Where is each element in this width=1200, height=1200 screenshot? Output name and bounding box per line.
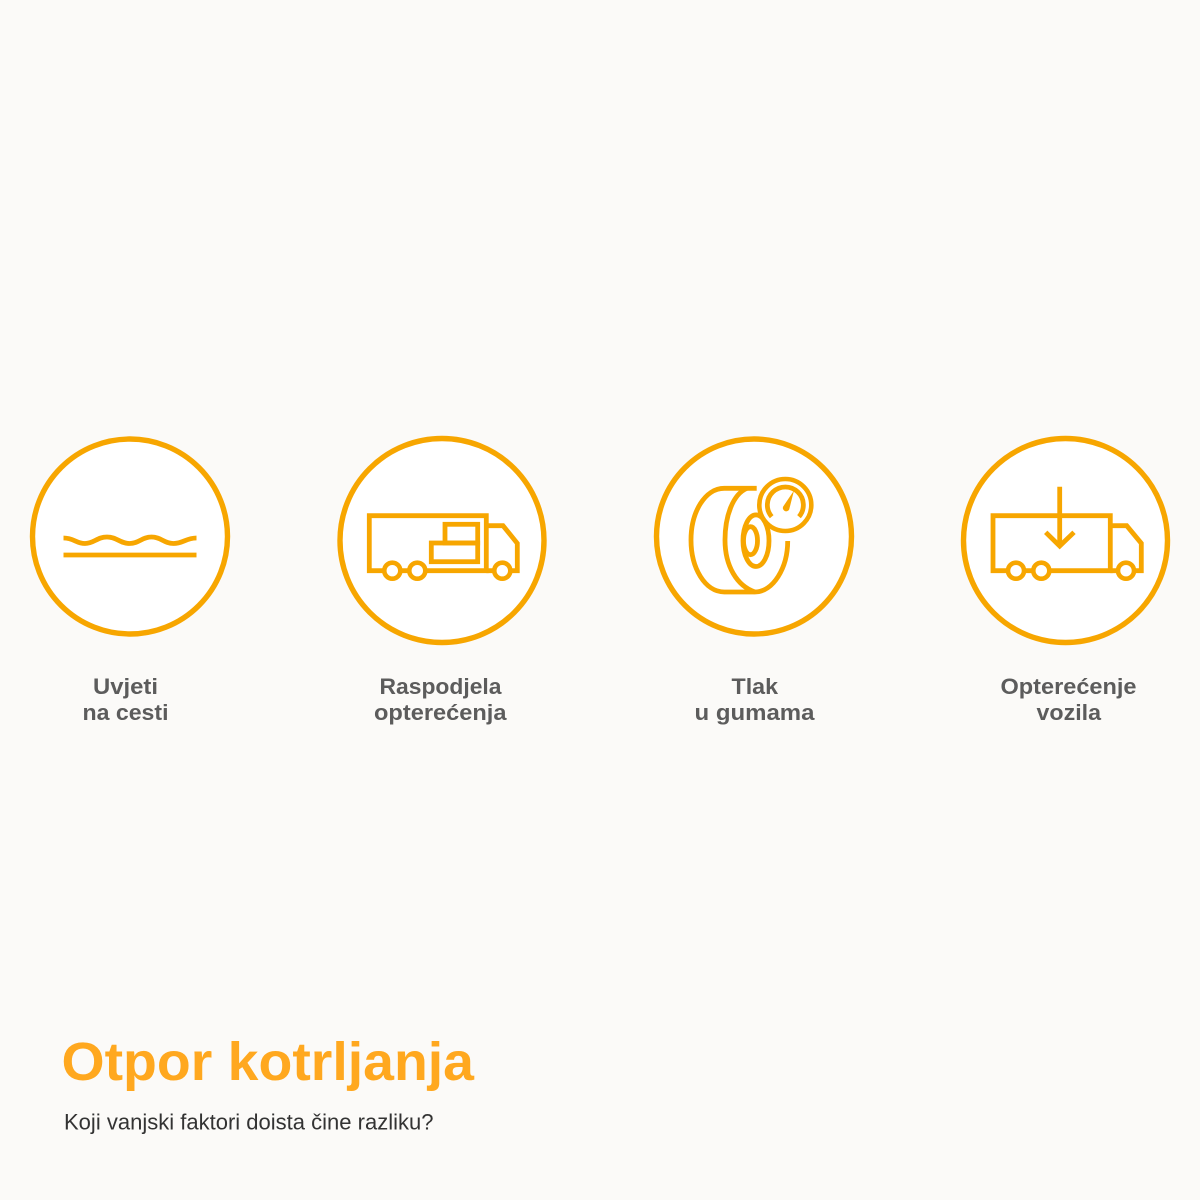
panel: load distribution [340,438,544,725]
subtitle: Koji vanjski faktori doista čine razliku? [64,1110,434,1134]
panel: road conditions [32,439,228,725]
icon: truck with down arrow [964,438,1168,642]
label: vehicle load: vozila [1036,700,1101,725]
label: road conditions: Uvjeti [93,674,158,699]
icon: road surface [32,439,228,634]
icon: tyre with pressure gauge [656,439,852,634]
icon: truck with boxes [340,438,544,642]
label: load distribution: opterećenja [374,700,507,725]
label: tyre pressure [694,674,815,725]
label: road conditions: na cesti [82,700,168,725]
label: vehicle load: Opterećenje [1000,674,1136,699]
panel: tyre pressure [656,439,852,725]
label: vehicle load [1000,674,1136,725]
label: load distribution: Raspodjela [380,674,502,699]
label: tyre pressure: Tlak [732,674,778,699]
panel: vehicle load [964,438,1168,725]
label: road conditions [82,674,168,725]
label: tyre pressure: u gumama [694,700,815,725]
title: Otpor kotrljanja [62,1032,475,1092]
label: load distribution [374,674,507,725]
